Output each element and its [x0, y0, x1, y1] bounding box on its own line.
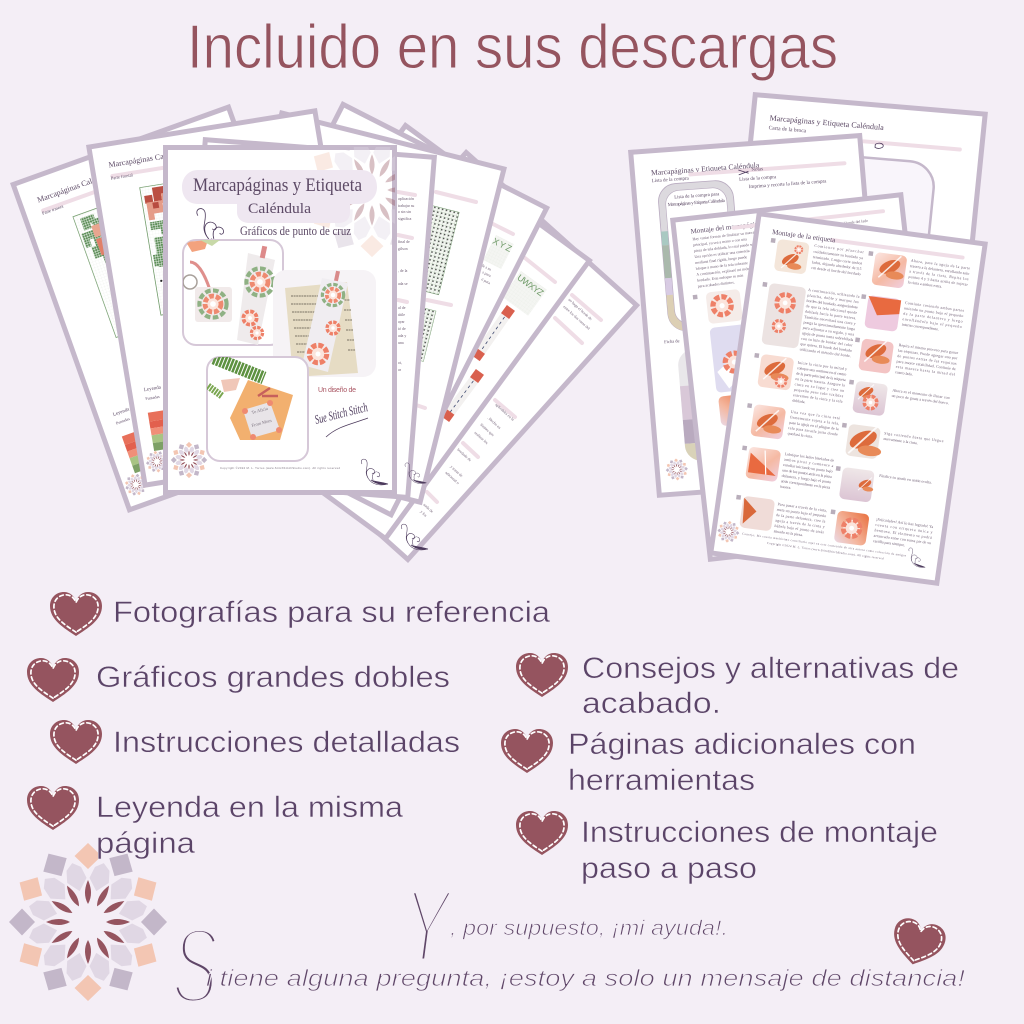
item: fotografías	[50, 592, 550, 636]
photo: gift box with tag: From Mom	[251, 418, 273, 428]
script message: i tiene alguna pregunta, ¡estoy a solo un mensaje de distancia!	[206, 965, 966, 991]
step text: left column: quedará la cinta.	[787, 431, 813, 439]
step text: right column: uniendo un punto bajo el pequeño	[904, 306, 964, 318]
page: bookmark assembly: para acabados distintos.	[698, 280, 735, 289]
icon: mandala	[665, 458, 689, 481]
step text: left column: firmemente sujeta a la tela,	[790, 415, 840, 427]
page: back fan page with end notes: . Hecho en	[486, 416, 501, 430]
page: bookmark assembly: bordado. Este enfoque es más	[697, 273, 744, 283]
step text: left column: situado en la pieza.	[773, 529, 803, 537]
icon: mandala	[716, 519, 741, 544]
page: back fan page with end notes: límites que	[479, 423, 495, 437]
page: shopping list: Notas	[751, 167, 763, 173]
page: bookmark assembly: principal, ya sea a mano o con una	[693, 237, 747, 248]
step text: right column: Repita el mismo proceso para ganar	[899, 343, 959, 355]
feature list: left column	[27, 592, 550, 860]
title: Incluido en sus descargas	[187, 13, 838, 82]
step text: left column: utilizando el método del borde.	[799, 347, 851, 358]
page: instruction text page: ayar	[398, 320, 405, 324]
step text: left column: trasera.	[780, 485, 792, 490]
page: alphabet chart: s para	[482, 270, 492, 278]
step text: left column: delantera, y luego bajo el punto	[781, 474, 831, 485]
step text: right column: Continúe cosiendo ambas partes	[905, 301, 965, 313]
page: bookmark assembly: Una opción es utilizar una entretela	[694, 249, 750, 259]
step text: right column: de puntos extras de las esquinas	[897, 354, 957, 366]
page: shopping list: Ficha de	[664, 338, 680, 344]
page: back part chart: Parte trasera	[41, 204, 64, 216]
step text: left column: en la parte trasera. Asegure la	[795, 377, 845, 388]
icon: mandala	[122, 471, 150, 499]
step text: left column: pase la aguja en el pliegue de la	[789, 421, 839, 431]
step photos	[735, 239, 909, 546]
step text: left column: ambos picos y comience a	[784, 458, 834, 468]
step text: right column: puntos 4 y 5 hasta arriba de sujetar	[908, 275, 969, 287]
panel: left fan of pattern pages	[13, 104, 637, 560]
page: cover	[163, 145, 397, 495]
page: bookmark assembly: mediana final rígida, luego puede	[695, 255, 748, 266]
page: shopping list: Lista de la compra	[652, 177, 690, 184]
page: instruction text page: , de la	[398, 269, 408, 274]
cover heading: Marcapáginas y Etiqueta	[193, 175, 363, 196]
photo: bookmark on open book	[273, 270, 376, 377]
step text: right column: cuenta con etiqueta única y	[875, 523, 933, 534]
step text: left column: uno de los puntos atrás en la pieza	[782, 468, 832, 479]
shopping list card: Lista de la compra para	[674, 192, 720, 201]
step text: right column: cartilla para siempre.	[873, 539, 905, 547]
photo: gift box with tag: To Alicia	[251, 406, 268, 415]
step text: right column: cuarto lado.	[895, 370, 913, 377]
step text: left column: Inicie la cinta por la mitad y	[797, 361, 847, 371]
page: back part chart: Leyenda	[112, 407, 131, 418]
heading: Montaje de la etiqueta	[772, 228, 965, 262]
footer note: Copyright ©2024 M. L. Torres (www.StitchStitchStudio.com). All rights reserved	[767, 540, 884, 561]
page: instruction text page: ar	[398, 368, 402, 372]
cover heading	[193, 175, 363, 238]
page: bookmark assembly: Montaje del marcapáginas	[690, 219, 765, 236]
item: leyenda	[27, 786, 403, 860]
legend table	[122, 430, 152, 473]
page: bookmark assembly: A continuación, explicaré mi método	[696, 266, 754, 278]
step text: left column: de la parte principal de la etiqueta	[796, 372, 846, 382]
photo: gift box with tag	[207, 357, 308, 461]
page: back fan page with end notes: bordado de	[456, 448, 472, 463]
step text: right column: hermosa. El elemento se podrá	[874, 528, 932, 540]
page: instruction text page: útile	[398, 313, 405, 317]
cover title pill	[182, 170, 377, 223]
step text: left column: ponga la aproximadamente larga	[803, 320, 855, 331]
page: cutting card: Marcapáginas y Etiqueta Caléndula	[769, 113, 885, 132]
step text: left column: de la parte delantera, cree la	[776, 513, 826, 525]
signature	[313, 399, 369, 437]
step text: left column: A continuación, utilizando la	[808, 288, 860, 300]
item: consejos	[516, 652, 959, 720]
page: cutting card: Carta de la broca	[768, 125, 807, 134]
item: instrucciones	[50, 720, 460, 764]
icon: swirl ornament	[197, 209, 236, 246]
item: montaje: Instrucciones de montaje	[581, 816, 938, 849]
step text: left column: También necesitará una cinta y	[804, 315, 856, 326]
step text: left column: Comience por planchar	[814, 244, 865, 254]
page: instruction text page: ió de	[398, 327, 406, 331]
page: bookmark assembly: Hay varias formas de finalizar su marcapáginas.	[692, 229, 767, 241]
page: instruction text page: una	[398, 341, 404, 345]
icon: mandala	[144, 449, 170, 474]
page: alphabet chart	[188, 104, 547, 515]
page: instruction text page: ada se	[398, 282, 408, 286]
script message: Y	[403, 868, 455, 985]
item: fotografías: Fotografías para su referencia	[113, 596, 550, 629]
page: back part chart: Puntadas	[115, 416, 131, 426]
step text: left column: terminado. Luego corte ambos	[813, 255, 863, 266]
step text: left column: doblada.	[792, 399, 806, 404]
page: instruction text page: ot,	[398, 361, 402, 366]
step text: right column: Siga cosiendo hasta que llegue	[884, 431, 944, 443]
page: back fan page with end notes: y los	[419, 510, 428, 518]
page: back fan page with end notes: nada de	[422, 503, 434, 514]
script message: , por supuesto, ¡mi ayuda!.	[450, 917, 728, 940]
step text: left column: atrás correspondiente en la pieza	[781, 479, 831, 490]
page: instruction text page: final de	[398, 240, 410, 244]
step text: right column: trasera a la delantera, enrollando solo	[910, 264, 970, 277]
item: consejos: acabado.	[582, 687, 721, 720]
step text: left column: de que la tela adicional quede	[806, 304, 858, 315]
step text: right column: nuevamente a la cinta.	[883, 437, 918, 445]
photo: bookmark on lilac	[709, 323, 762, 393]
icon: scissors	[738, 169, 749, 175]
item: montaje: paso a paso	[581, 852, 757, 885]
footer note: Consejo: Me cuesta muchísimo conciliarlo aquí en este contenido de otra autora como colección de amigos	[742, 532, 907, 558]
cover heading: Caléndula	[248, 201, 312, 217]
step text: left column: báñela bajo el punto de atrás	[774, 524, 825, 535]
step text: right column: un poco de guata a través del hueco.	[891, 394, 949, 405]
item: páginas adicionales	[501, 728, 916, 797]
panel: right fan of assembly and tool pages	[631, 95, 985, 583]
page: back fan page with end notes: realizar los	[473, 431, 489, 446]
page: front part chart: Parte frontal	[110, 172, 134, 181]
step text: right column: a través de la cinta. Repita los	[909, 269, 969, 281]
page: bookmark assembly: el borde del lado	[842, 219, 868, 226]
item: gráficos: Gráficos grandes dobles	[96, 661, 450, 694]
page: shopping list	[631, 136, 888, 495]
page: front part chart	[89, 111, 371, 485]
page: front part chart: Leyenda	[144, 385, 162, 393]
page: shopping list: Imprima y recorte la lista de la compra	[749, 179, 827, 190]
page: back fan page with end notes: entre los dos caras del	[562, 305, 591, 331]
page: back part chart	[13, 107, 345, 510]
item: montaje	[516, 811, 938, 885]
signature: Sue Stitch Stitch	[313, 399, 369, 427]
step text: left column: enrollar iniciando un punto bajo	[783, 463, 833, 474]
step text: right column: para mayor estabilidad. Continúe de	[896, 359, 956, 371]
icon: bottom heart	[887, 915, 949, 971]
photo: stitched bookmark end	[706, 289, 743, 324]
shopping list card	[658, 180, 735, 331]
item: páginas adicionales: Páginas adicionales con	[568, 728, 916, 761]
step text: left column: lados, dejando alrededor de 9,5	[812, 260, 862, 272]
script message: S	[172, 905, 218, 1024]
step text: left column: plancha, doble y marque los	[807, 293, 859, 305]
shopping list card: Marcapáginas y Etiqueta Caléndula	[668, 199, 726, 208]
page: instruction text page: gilson	[398, 247, 408, 251]
page: bookmark assembly: bloque a mano de la tela sobrante	[696, 261, 748, 271]
second project photo	[678, 352, 697, 460]
feature list: right column	[501, 652, 959, 885]
step text: left column: pequeño pero solo visibles	[794, 388, 844, 398]
icon: faded mandala watermark	[314, 147, 395, 257]
step text: left column: Para pasar a través de la cinta,	[777, 502, 827, 514]
step text: left column: bordes del bordado, asegurándose	[806, 299, 858, 311]
step text: left column: meta un punto bajo el pequeño	[777, 508, 827, 518]
step text: left column: cm desde el borde del bordado	[811, 266, 861, 276]
step text: left column: coloque una continua en el centro	[797, 366, 847, 377]
item: instrucciones: Instrucciones detalladas	[113, 726, 460, 759]
step text: right column: Ahora, pase la aguja de la parte	[910, 259, 971, 272]
page: instruction text page: trabajar su	[398, 204, 414, 208]
step text: right column: la cinta a ambos extra.	[907, 280, 942, 289]
step text: left column	[773, 244, 867, 540]
step text: left column: Lubrique los lados biselados de	[784, 452, 835, 463]
page: instruction text page	[179, 140, 434, 497]
step text: right column: esta manera hasta la mitad del	[895, 365, 955, 377]
step text: right column: Ahora es el momento de llenar con	[892, 388, 950, 400]
photo: keychain pillow and bookmark	[183, 240, 283, 345]
page: bookmark assembly: a la tela	[842, 226, 855, 232]
step text: right column: ¡Felicidades! Así lo has logrado! Ya	[876, 517, 934, 529]
step text: left column: extremos de la cinta y la tela	[793, 393, 843, 404]
icon: large mandala	[9, 843, 167, 1001]
chart: back stitch chart	[73, 180, 220, 337]
step text: left column: que quiera. El borde del bordado	[800, 342, 852, 353]
page: bookmark assembly: pieza de tela doblada, lo cual puede ser	[694, 242, 756, 254]
page: tag assembly	[711, 214, 985, 583]
page: alphabet chart: XYZ	[491, 236, 514, 254]
item: leyenda: página	[96, 827, 195, 860]
step text: right column: interno correspondiente.	[901, 323, 939, 331]
page: back fan page with end notes: y toma de	[449, 465, 464, 478]
step text: left column: aguja a través de la cinta y	[775, 518, 825, 529]
step text: left column: Una vez que la cinta esté	[790, 410, 841, 420]
page: double-size chart	[198, 113, 504, 502]
step text: right column: enrollándolo bajo el pequeño	[902, 317, 962, 329]
page: instruction text page: al de	[398, 306, 406, 310]
icon: mandala logo	[171, 442, 207, 478]
page: alphabet chart: de s su	[481, 263, 492, 272]
step number tags	[732, 238, 873, 515]
page: alphabet chart with bookmark strips	[202, 125, 589, 539]
page: cutting card	[721, 95, 985, 456]
icon: swirl	[907, 548, 928, 568]
page: back fan page with end notes	[237, 153, 637, 560]
page: back fan page with end notes: aplicables en la	[494, 403, 515, 422]
chart: front stitch chart	[140, 167, 289, 315]
page: shopping list: Marcapáginas y Etiqueta Caléndula	[651, 160, 760, 177]
step text: left column: tela para sacarla justo donde	[788, 426, 838, 437]
page: bookmark assembly	[673, 195, 938, 559]
page: alphabet chart: ó para	[481, 277, 491, 285]
item: páginas adicionales: herramientas	[568, 764, 755, 797]
step text: right column: arrancado entre con suma pie de su	[873, 534, 931, 545]
item: leyenda: Leyenda en la misma	[96, 791, 403, 824]
step text: left column: con su hilo de bordar del color	[801, 337, 853, 348]
step text: left column: cuidadosamente su bordado ya	[813, 250, 863, 260]
designer credit: Un diseño de	[318, 387, 356, 394]
heading: Montaje de la etiqueta: Montaje de la etiqueta	[772, 228, 837, 245]
step text: right column: Finalice su anudo en unión oculta.	[879, 474, 932, 485]
photo: hands stitching	[718, 393, 753, 426]
step text: right column: de la parte delantera y luego	[903, 312, 963, 324]
step text: right column	[869, 258, 971, 551]
page: instruction text page: o sin sin	[398, 210, 411, 214]
script message	[172, 868, 966, 1024]
icon: corner swirl	[361, 459, 388, 485]
page: shopping list: Lista de la compra	[739, 175, 777, 183]
page: back part chart: Marcapáginas Caléndula	[36, 169, 114, 205]
legend table	[148, 410, 172, 451]
page: instruction text page: significa	[398, 217, 412, 221]
step text: right column: las esquinas. Puede agregar uno por	[898, 349, 958, 361]
page: front part chart: Marcapáginas Caléndula	[108, 148, 188, 169]
page: back fan page with end notes: adicional o	[444, 471, 460, 485]
cover heading: Gráficos de punto de cruz	[240, 224, 351, 238]
item: consejos: Consejos y alternativas de	[582, 652, 959, 685]
page: alphabet chart with bookmark strips: UWXYZ	[515, 272, 546, 298]
page: instruction text page: ada y	[398, 334, 406, 338]
item: gráficos	[27, 658, 450, 702]
step text: left column: doblada hacia la parte trasera.	[805, 310, 857, 320]
page: back fan page with end notes: no haga el borde de	[567, 298, 593, 321]
page: front part chart: Puntadas	[145, 394, 160, 401]
page: instruction text page: aplicación	[398, 197, 414, 201]
step text: left column: para adjuntar a su regalo, y una	[802, 326, 855, 338]
step text: left column: aguja de punta roma sobrehilada	[802, 331, 854, 342]
copyright line: Copyright ©2024 M. L. Torres (www.StitchStitchStudio.com). All rights reserved	[220, 466, 340, 470]
step text: left column: cinta en su lugar y cree un	[794, 382, 844, 393]
